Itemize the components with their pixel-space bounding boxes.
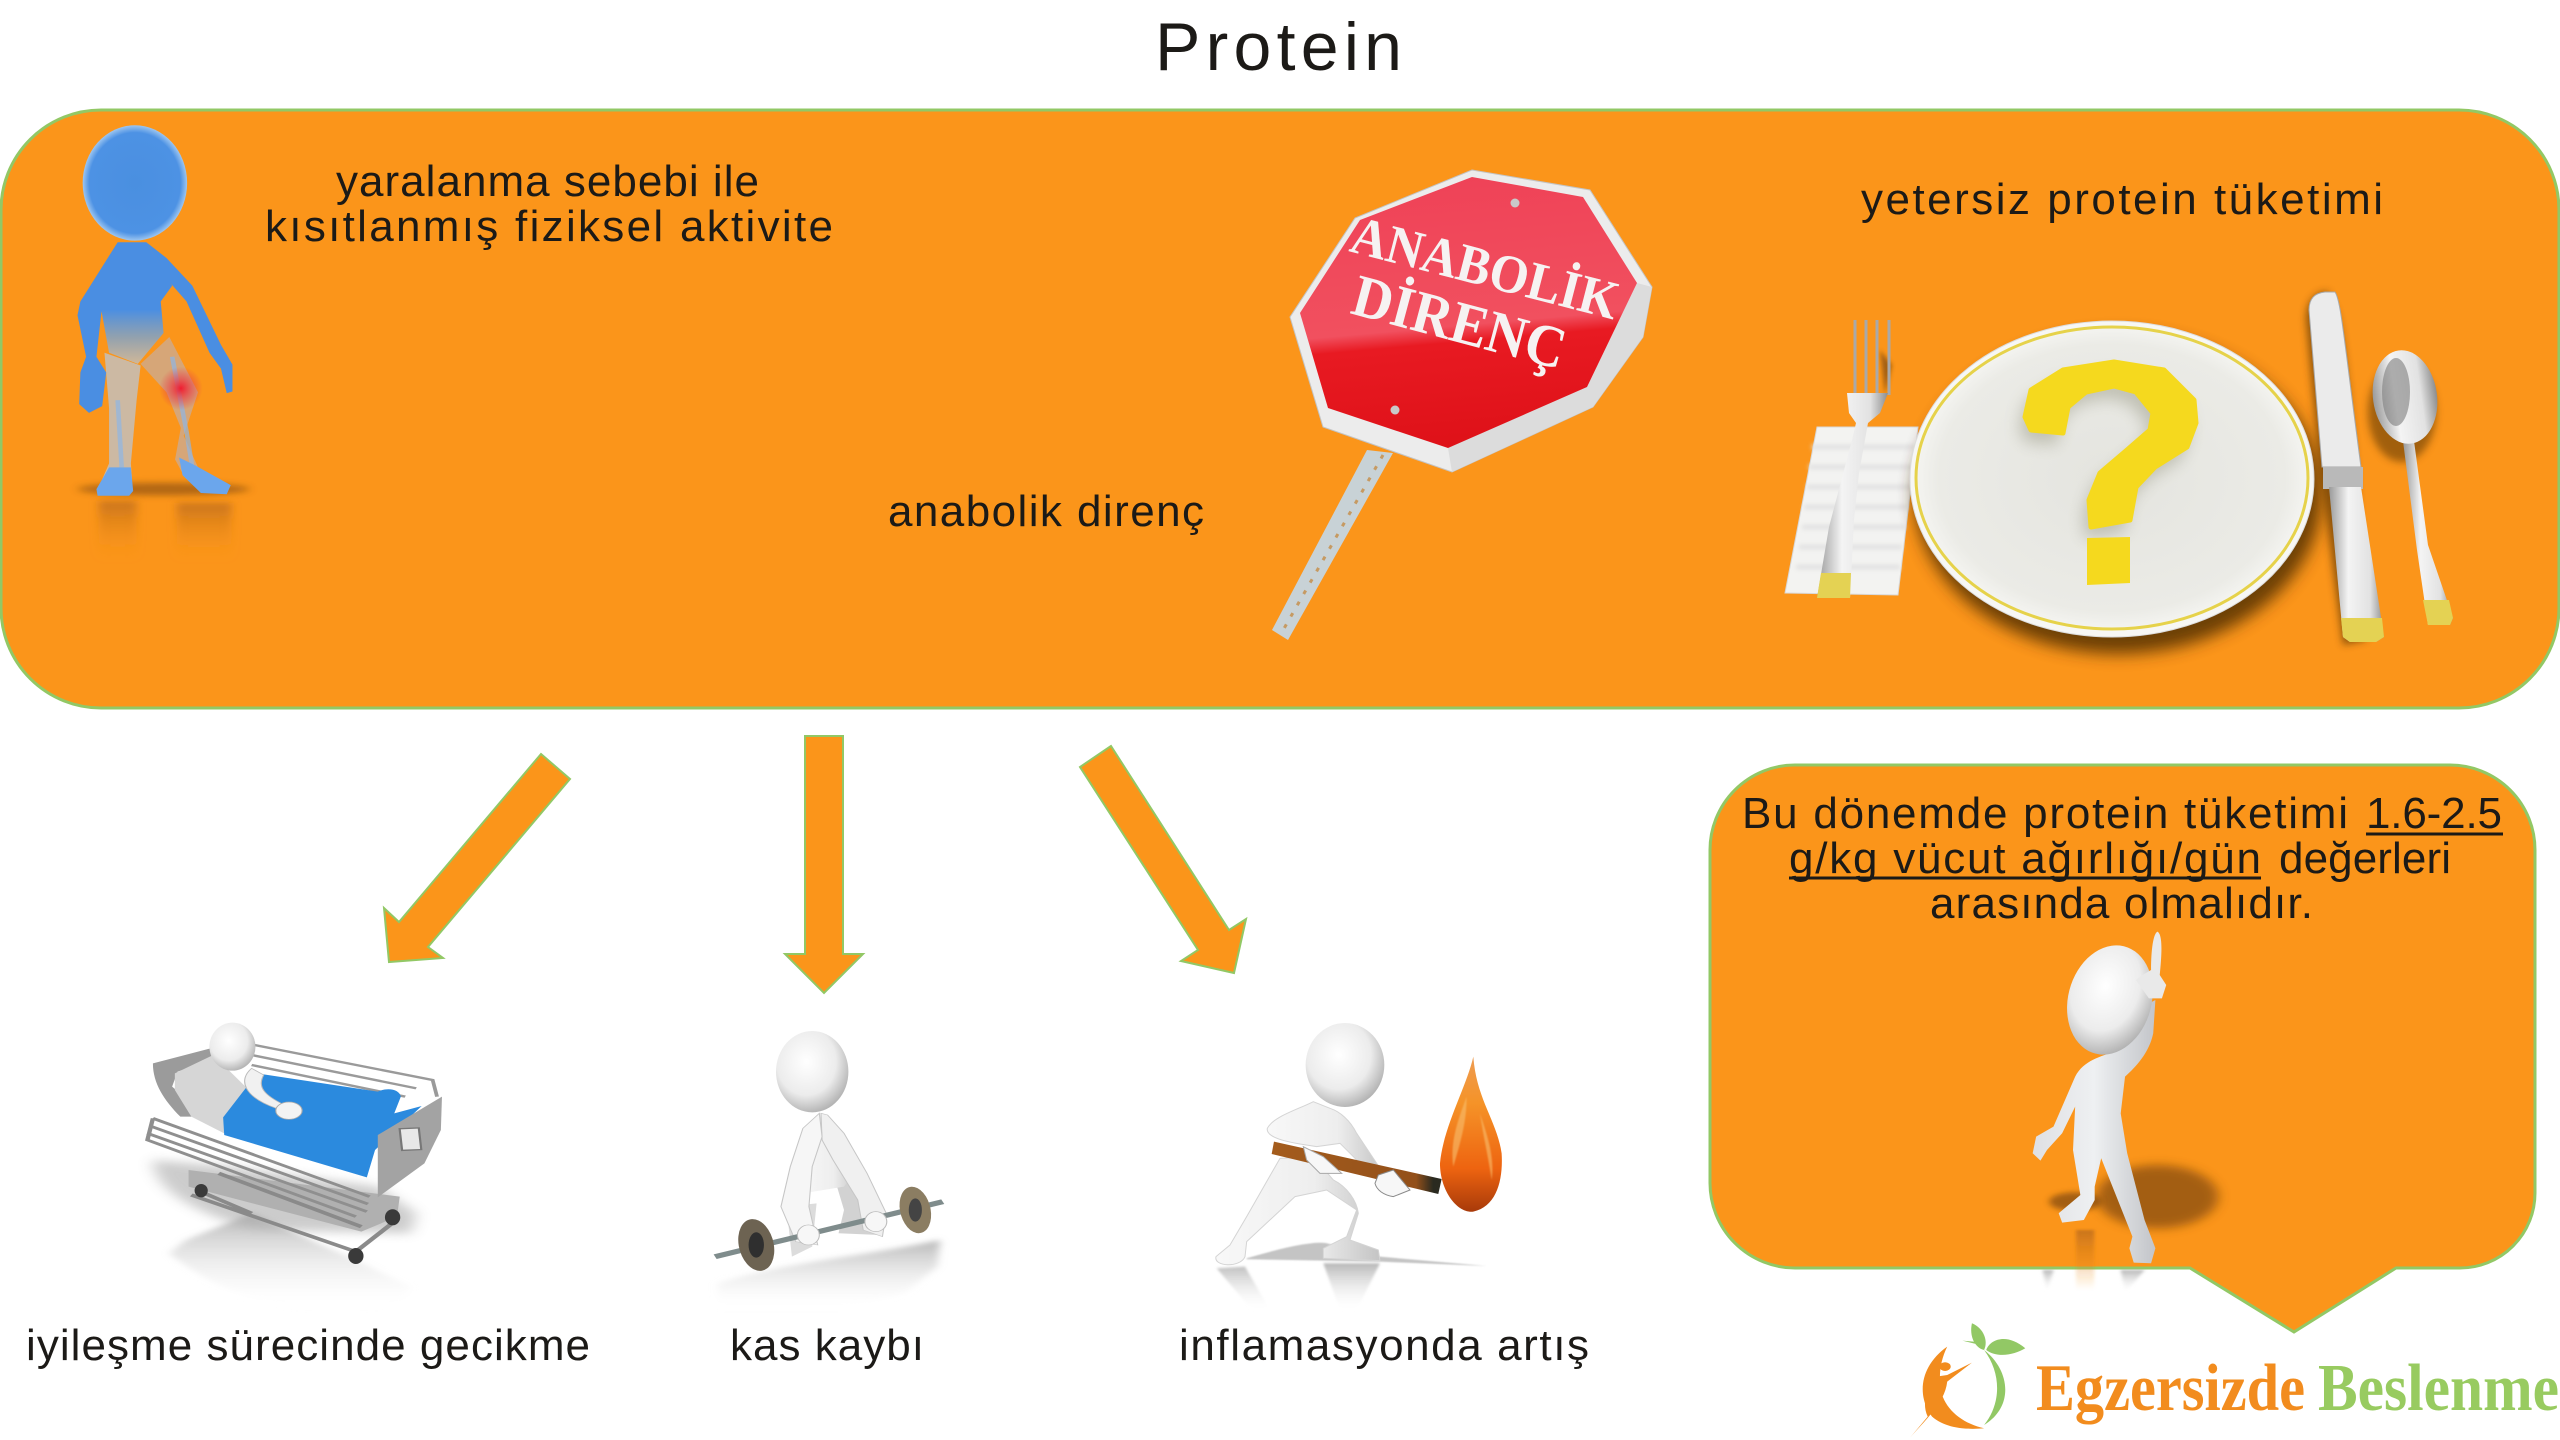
arrow: to increased inflammation <box>1080 746 1246 973</box>
icon: stop sign: DİRENÇ <box>1346 261 1573 382</box>
callout: protein recommendation <box>1710 765 2535 1332</box>
arrow: to delayed recovery <box>384 754 570 962</box>
knife <box>2306 292 2384 645</box>
arrow: to muscle loss <box>785 736 863 993</box>
icon: injured blue figure <box>77 125 250 560</box>
panel: causes of anabolic resistance <box>1 110 2559 708</box>
text: anabolic resistance: anabolik direnç <box>888 487 1204 536</box>
fork <box>1817 320 1892 598</box>
text: restricted activity <box>265 157 833 251</box>
callout text: 1.6-2.5 <box>2366 789 2502 838</box>
callout text: g/kg vücut ağırlığı/gün <box>1789 834 2261 883</box>
logo: Egzersizde Beslenme: Beslenme <box>2318 1350 2559 1425</box>
title: Protein <box>1155 9 1402 85</box>
callout text: değerleri <box>2279 834 2451 883</box>
icon: figure with burning match <box>1216 1023 1502 1312</box>
logo icon <box>1910 1323 2025 1437</box>
icon: figure pointing up <box>2033 932 2218 1293</box>
label: muscle loss: kas kaybı <box>730 1321 924 1370</box>
text: restricted activity: yaralanma sebebi ile <box>336 157 759 206</box>
logo: Egzersizde Beslenme <box>1910 1323 2559 1437</box>
icon: figure lifting barbell <box>715 1031 943 1310</box>
callout text: Bu dönemde protein tüketimi <box>1742 789 2348 838</box>
icon: stop sign <box>1272 170 1652 640</box>
spoon <box>2367 346 2453 625</box>
logo: Egzersizde Beslenme: Egzersizde <box>2036 1350 2305 1425</box>
text: restricted activity: kısıtlanmış fiziksel aktivite <box>265 202 833 251</box>
icon: patient in hospital bed <box>147 1023 442 1310</box>
icon: stop sign: ANABOLİK <box>1345 204 1625 331</box>
callout text <box>1742 789 2503 928</box>
label: delayed recovery: iyileşme sürecinde gecikme <box>26 1321 590 1370</box>
label: increased inflammation: inflamasyonda artış <box>1179 1321 1589 1370</box>
icon: plate with question mark and cutlery <box>1785 292 2453 654</box>
callout text: arasında olmalıdır. <box>1930 879 2313 928</box>
text: inadequate protein intake: yetersiz protein tüketimi <box>1861 175 2383 224</box>
